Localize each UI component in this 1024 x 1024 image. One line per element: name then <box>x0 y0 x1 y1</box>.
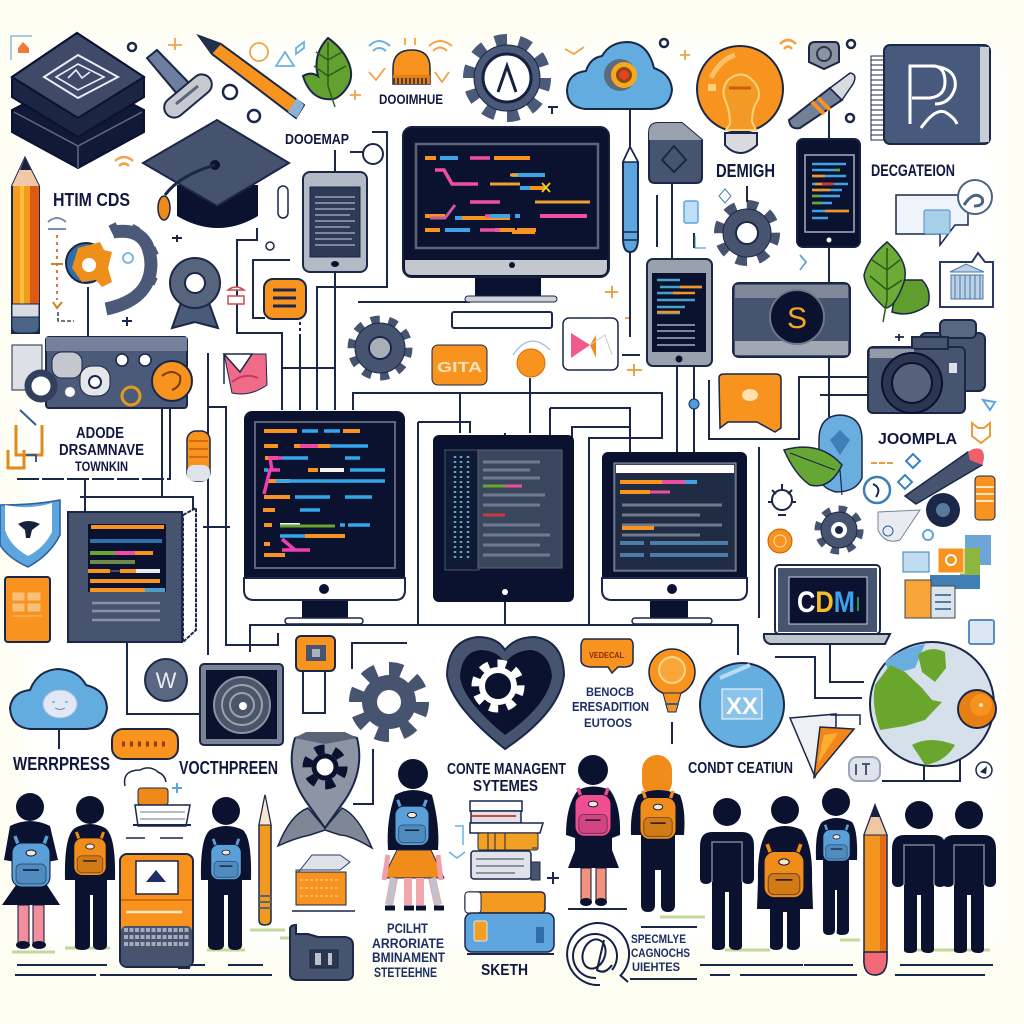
label: WERRPRESS: WERRPRESS <box>13 754 110 774</box>
label: Pcilht arroriate statement: STETEEHNE <box>374 965 437 980</box>
icon: small blue token <box>684 189 731 248</box>
icon: stacked isometric box <box>12 33 144 168</box>
icon: large gear middle <box>356 669 422 735</box>
label: Benocb creation eutoos: EUTOOS <box>584 716 632 730</box>
label: Adobe Dreamweaver toolkit: TOWNKIN <box>75 458 128 474</box>
icon: camera with S lens <box>733 283 850 357</box>
icon: node circle <box>350 144 383 164</box>
icon: lens <box>926 493 960 527</box>
icon: dark gear <box>720 186 774 260</box>
icon: blue orb: XX <box>726 693 758 720</box>
icon: dashed orange leader <box>48 218 74 321</box>
icon: dark gear center <box>353 321 407 375</box>
icon: folders cluster <box>903 535 994 644</box>
label: Pcilht arroriate statement: BMINAMENT <box>372 950 446 965</box>
label: DEMIGH: DEMIGH <box>716 161 775 181</box>
icon: small capsule <box>228 186 288 304</box>
label: HTIM CDS: HTIM CDS <box>53 190 130 210</box>
icon: adult figures pair <box>892 801 996 953</box>
icon: green leaf <box>303 38 351 107</box>
icon: dark book with code <box>68 508 196 642</box>
icon: shield gear with wings <box>278 732 372 848</box>
icon: right green leaves <box>864 242 929 322</box>
label: Pcilht arroriate statement: PCILHT <box>387 921 429 936</box>
icon: large orange pencil <box>864 805 887 975</box>
label: Benocb creation eutoos: BENOCB <box>586 687 634 699</box>
ground lines <box>12 909 993 979</box>
icon: small grey stamp <box>849 757 992 781</box>
icon: orange blue bracket <box>8 410 42 468</box>
icon: grey plug <box>809 42 839 69</box>
label: Adobe Dreamweaver toolkit <box>59 425 144 474</box>
label: Specmlye cagnochs uiehtes: SPECMLYE <box>631 932 686 946</box>
icon: marker <box>789 73 855 128</box>
icon: small light bulb <box>649 649 695 712</box>
icon: rectangular connector box <box>452 312 552 328</box>
icon: slim orange pencil <box>259 795 271 925</box>
icon: orange pill <box>112 729 178 759</box>
icon: adult figure one <box>700 798 754 950</box>
icon: phone with code <box>797 139 860 247</box>
icon: open grey gear <box>106 224 157 309</box>
icon: monitor right with document <box>602 452 747 624</box>
icon: student girl orange pack <box>757 796 813 950</box>
icon: orange ball <box>513 341 550 377</box>
icon: browser phone <box>647 259 712 366</box>
icon: globe <box>870 642 996 781</box>
label: Conte Managent Sytemes: SYTEMES <box>473 778 538 795</box>
icon: student orange backpack <box>65 796 115 950</box>
icon: monitor left with code <box>244 411 405 624</box>
icon: laptop CDM <box>764 565 890 644</box>
icon: orange light bulb <box>697 46 783 153</box>
label: Pcilht arroriate statement <box>372 921 446 980</box>
label: Pcilht arroriate statement: ARRORIATE <box>372 936 444 951</box>
icon: dark file <box>649 123 702 183</box>
icon: WordPress circle <box>145 659 187 701</box>
icon: blue pencil vertical <box>623 147 638 252</box>
icon: blue orb <box>700 663 784 747</box>
icon: orange folder <box>292 855 355 911</box>
icon: book with P logo <box>871 45 990 144</box>
connector lines <box>17 107 960 804</box>
icon: small orange cylinder <box>975 476 995 520</box>
icon: orange shield mark <box>871 400 995 489</box>
icon: heart with gear <box>447 637 564 749</box>
icon: small code cross marks <box>605 255 904 376</box>
icon: pink envelope <box>224 354 267 394</box>
icon: graduation cap <box>143 120 289 228</box>
label: VOCTHPREEN: VOCTHPREEN <box>179 758 278 778</box>
icon: camera with S lens: S <box>787 302 807 335</box>
icon: orange GitHub badge: GITA <box>437 359 482 376</box>
label: DECGATEION: DECGATEION <box>871 162 955 180</box>
icon: student girl blue backpack <box>2 793 60 949</box>
icon: wrench tool <box>147 50 216 122</box>
label: Specmlye cagnochs uiehtes: UIEHTES <box>632 960 680 974</box>
icon: laptop CDM: CDM <box>797 586 855 619</box>
icon: book stack <box>449 801 559 954</box>
icon: cameras pair <box>868 320 985 413</box>
icon: small books with cloud <box>125 768 191 838</box>
icon: orange cylinder <box>187 431 210 481</box>
icon: monitor center editor <box>433 435 574 602</box>
icon: orange coin <box>768 529 792 553</box>
icon: WordPress circle: W <box>156 668 177 693</box>
panel: Adobe toolkit <box>12 337 192 408</box>
icon: small gear right <box>819 510 859 550</box>
label: Adobe Dreamweaver toolkit: DRSAMNAVE <box>59 442 144 459</box>
icon: blue connector dot <box>689 399 699 409</box>
icon: pen pink tip <box>905 448 984 504</box>
icon: orange tablet <box>5 577 50 642</box>
label: SKETH: SKETH <box>481 962 528 979</box>
icon: dark square with spiral lens <box>200 664 283 745</box>
icon: vertical pencil left <box>12 158 39 333</box>
icon: blue cloud with face <box>10 669 107 729</box>
icon: student blue backpack right <box>816 788 857 935</box>
icon: orange triangle folder <box>790 714 860 777</box>
icon: orange retro computer <box>120 854 193 967</box>
label: CONDT CEATIUN: CONDT CEATIUN <box>688 760 793 777</box>
icon: orange callout small <box>581 639 633 673</box>
label: Benocb creation eutoos: ERESADITION <box>572 700 649 714</box>
icon: decorative marks top <box>115 38 855 326</box>
icon: orange chat bubble <box>719 374 781 432</box>
icon: blue cloud with target <box>567 42 672 109</box>
icon: orange blue gear <box>66 242 112 287</box>
icon: monitor top with code <box>403 127 609 302</box>
icon: blue shape with leaf <box>784 415 862 495</box>
icon: outline gear small <box>768 484 796 515</box>
icon: shield <box>0 500 60 567</box>
icon: small orange house <box>11 36 32 60</box>
icon: student girl orange skirt <box>383 759 444 908</box>
label: Conte Managent Sytemes <box>447 761 566 795</box>
label: Specmlye cagnochs uiehtes: CAGNOCHS <box>631 946 690 960</box>
icon: orange chip with signals <box>369 38 452 84</box>
label: DOOIMHUE: DOOIMHUE <box>379 91 443 107</box>
icon: ring icon <box>864 477 890 503</box>
icon: chat window and circle <box>896 180 992 245</box>
label: Benocb creation eutoos <box>572 687 649 730</box>
icon: student girl pink backpack <box>566 755 620 906</box>
icon: gear with letter A <box>470 41 544 115</box>
icon: dark socket card <box>290 925 353 980</box>
icon: paper plane grey <box>878 510 933 541</box>
icon: orange callout small: VEDECAL <box>589 651 624 660</box>
icon: orange chip square <box>296 636 335 671</box>
label: Conte Managent Sytemes: CONTE MANAGENT <box>447 761 566 778</box>
icon: student orange hood <box>631 755 684 912</box>
label: JOOMPLA: JOOMPLA <box>878 431 957 448</box>
label: Specmlye cagnochs uiehtes <box>631 932 690 974</box>
icon: orange GitHub badge <box>432 345 487 385</box>
label: Adobe Dreamweaver toolkit: ADODE <box>76 425 124 442</box>
icon: tablet with text <box>303 172 367 272</box>
icon: ribbon badge <box>170 258 220 328</box>
icon: diagonal pencil <box>199 36 304 118</box>
label: DOOEMAP: DOOEMAP <box>285 131 349 148</box>
icon: at sign circle <box>567 923 629 985</box>
icon: mail card <box>563 318 618 370</box>
icon: building card <box>940 253 993 307</box>
icon: student blue backpack <box>201 797 251 950</box>
icon: orange menu button <box>264 279 306 319</box>
